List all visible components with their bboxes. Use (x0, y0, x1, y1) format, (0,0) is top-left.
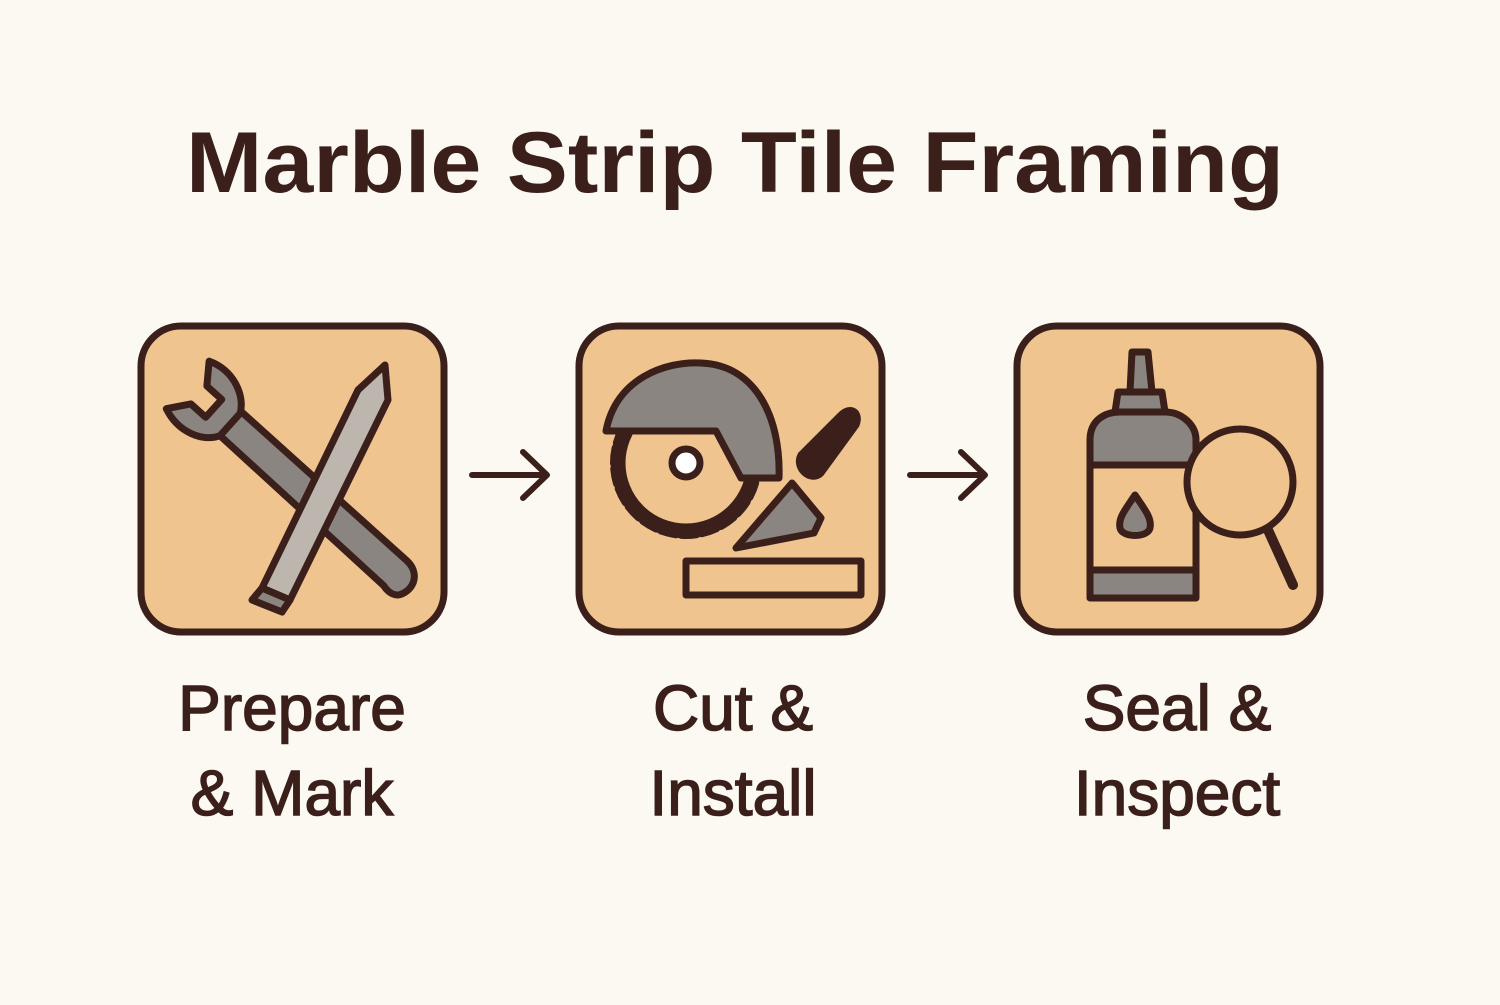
panel: seal & inspect icon (1017, 326, 1320, 632)
label: seal & inspect: Seal & (1083, 672, 1271, 744)
label: prepare & mark: Prepare (178, 672, 406, 744)
panel: prepare & mark icon (141, 326, 444, 632)
icon: wrench (164, 358, 435, 613)
arrow 2 (910, 452, 985, 498)
icon: sealant bottle (1090, 352, 1196, 598)
icon: magnifier (1187, 429, 1293, 585)
label: prepare & mark (178, 672, 406, 829)
label: cut & install: Install (649, 757, 817, 829)
label: cut & install (649, 672, 817, 829)
label: seal & inspect (1074, 672, 1280, 829)
label: prepare & mark: & Mark (191, 757, 394, 829)
arrow 1 (472, 452, 547, 498)
label: seal & inspect: Inspect (1074, 757, 1280, 829)
icon: pencil (252, 365, 388, 612)
icon: strip (686, 561, 861, 595)
icon: saw guard (606, 363, 779, 478)
icon: marker (799, 410, 857, 476)
icon: saw blade (616, 393, 756, 533)
title: Marble Strip Tile Framing (186, 115, 1284, 211)
label: cut & install: Cut & (653, 672, 813, 744)
panel: cut & install icon (579, 326, 882, 632)
icon: tile shard (736, 483, 821, 548)
